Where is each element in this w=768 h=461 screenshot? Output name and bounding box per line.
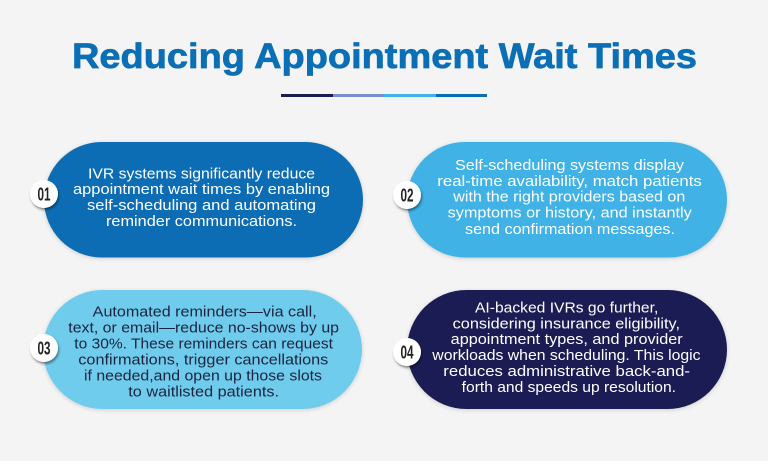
text block 04: appointment types, and provider — [451, 331, 683, 348]
number badge 01 — [30, 180, 58, 208]
text block 03: confirmations, trigger cancellations — [78, 351, 328, 368]
text block 02: Self-scheduling systems display — [455, 157, 685, 174]
text block 01 — [73, 165, 330, 230]
pill 04 background — [407, 290, 727, 409]
pill 03 background — [43, 290, 362, 409]
text block 03 — [68, 304, 339, 400]
panel: 02 — [393, 142, 727, 258]
text block 02: symptoms or history, and instantly — [448, 204, 692, 222]
number badge 03 — [30, 334, 58, 362]
text block 01: IVR systems significantly reduce — [88, 165, 315, 182]
text block 01: reminder communications. — [106, 213, 297, 230]
text block 04: reduces administrative back-and- — [443, 363, 690, 380]
number badge 02: 02 — [400, 186, 414, 206]
text block 01: appointment wait times by enabling — [73, 181, 330, 198]
text block 02: send confirmation messages. — [465, 221, 675, 238]
number badge 03: 03 — [38, 338, 50, 358]
panel: 03 — [30, 290, 362, 409]
number badge 04 — [393, 338, 421, 366]
number badge 04: 04 — [400, 342, 414, 362]
panel: 01 — [30, 142, 363, 258]
text block 04: workloads when scheduling. This logic — [431, 347, 701, 364]
text block 03: if needed,and open up those slots — [84, 367, 322, 384]
panel: 04 — [393, 290, 727, 409]
text block 02: with the right providers based on — [452, 189, 685, 206]
text block 02 — [437, 157, 702, 238]
text block 04: forth and speeds up resolution. — [462, 379, 676, 396]
title: Reducing Appointment Wait Times — [72, 37, 697, 76]
text block 03: text, or email—reduce no-shows by up — [68, 320, 339, 337]
text block 02: real-time availability, match patients — [437, 173, 702, 190]
number badge 02 — [393, 181, 421, 209]
pill 01 background — [44, 142, 363, 258]
text block 04: considering insurance eligibility, — [453, 315, 680, 332]
title underline — [281, 94, 487, 97]
text block 04 — [431, 299, 701, 396]
number badge 01: 01 — [38, 184, 50, 204]
text block 01: self-scheduling and automating — [87, 197, 316, 214]
text block 03: to 30%. These reminders can request — [74, 335, 334, 352]
text block 03: Automated reminders—via call, — [93, 304, 317, 321]
text block 04: AI-backed IVRs go further, — [475, 299, 658, 316]
text block 03: to waitlisted patients. — [128, 383, 279, 400]
pill 02 background — [407, 142, 727, 258]
